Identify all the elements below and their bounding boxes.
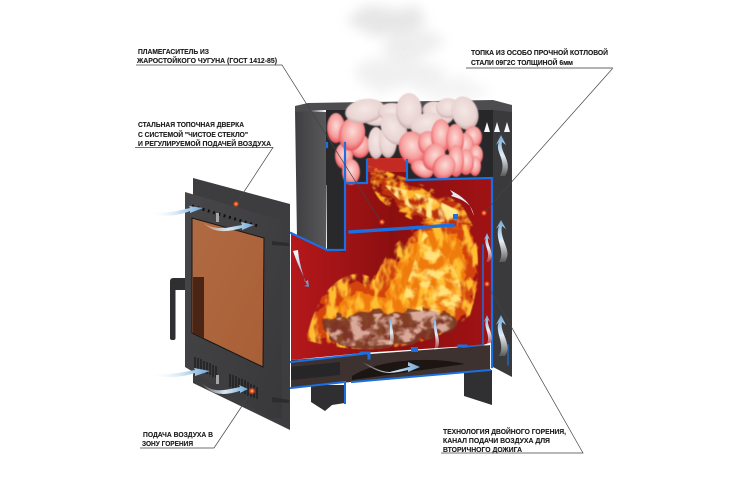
door glass (192, 218, 264, 367)
label: double combustion: ВТОРИЧНОГО ДОЖИГА (443, 445, 522, 454)
label: air supply (142, 430, 213, 448)
upper chamber shade (367, 158, 407, 172)
upper flame (366, 165, 474, 230)
firebox interior (291, 160, 492, 360)
lid (295, 100, 512, 112)
door bottom vents (195, 357, 257, 399)
door top vent slots (192, 206, 258, 226)
handle seen through glass (193, 277, 204, 338)
label: double combustion (443, 427, 566, 454)
label: double combustion: ТЕХНОЛОГИЯ ДВОЙНОГО ГОРЕНИЯ, (443, 427, 566, 436)
right side panel (493, 106, 512, 377)
left inner dark channel (326, 143, 345, 253)
label: flame arrester: ПЛАМЕГАСИТЕЛЬ ИЗ (138, 47, 209, 56)
baffle marker (453, 214, 458, 219)
label: door: И РЕГУЛИРУЕМОЙ ПОДАЧЕЙ ВОЗДУХА (138, 139, 271, 148)
leader lines (135, 65, 613, 453)
door hinges (272, 241, 289, 403)
smoke (349, 11, 485, 100)
marker dots (233, 201, 490, 394)
label: firebox steel (471, 48, 608, 67)
thick underline (466, 67, 613, 69)
ash pit (291, 345, 490, 388)
label: flame arrester: ЖАРОСТОЙКОГО ЧУГУНА (ГОСТ 1412-85) (136, 56, 278, 65)
door back plate (193, 178, 290, 430)
label: door: СТАЛЬНАЯ ТОПОЧНАЯ ДВЕРКА (138, 120, 244, 129)
label: flame arrester (136, 47, 278, 65)
stones (327, 93, 483, 185)
grate centre mark (411, 347, 418, 352)
back wall behind stones (326, 110, 494, 185)
label: firebox steel: ТОПКА ИЗ ОСОБО ПРОЧНОЙ КОТЛОВОЙ (471, 48, 608, 57)
stove rear body (295, 100, 512, 377)
label: door: С СИСТЕМОЙ "ЧИСТОЕ СТЕКЛО" (138, 130, 248, 139)
label: firebox steel: СТАЛИ 09Г2С ТОЛЩИНОЙ 6мм (471, 58, 573, 67)
door handle (170, 278, 190, 340)
rear legs and ash pit (291, 345, 492, 411)
burning logs (322, 309, 458, 348)
label: air supply: ЗОНУ ГОРЕНИЯ (142, 439, 193, 448)
door front frame (185, 192, 282, 418)
door bottom damper (216, 375, 219, 384)
main flame (306, 222, 478, 349)
door top damper (216, 213, 219, 222)
grate and blue section lines (291, 143, 508, 403)
label: double combustion: КАНАЛ ПОДАЧИ ВОЗДУХА ДЛЯ (443, 436, 550, 445)
left outer panel (295, 110, 326, 252)
label: door (138, 120, 271, 148)
right leg (464, 370, 492, 405)
label: air supply: ПОДАЧА ВОЗДУХА В (143, 430, 213, 439)
airflow arrows inside stove (293, 122, 510, 373)
left leg (311, 385, 345, 411)
door air arrows (150, 206, 254, 394)
